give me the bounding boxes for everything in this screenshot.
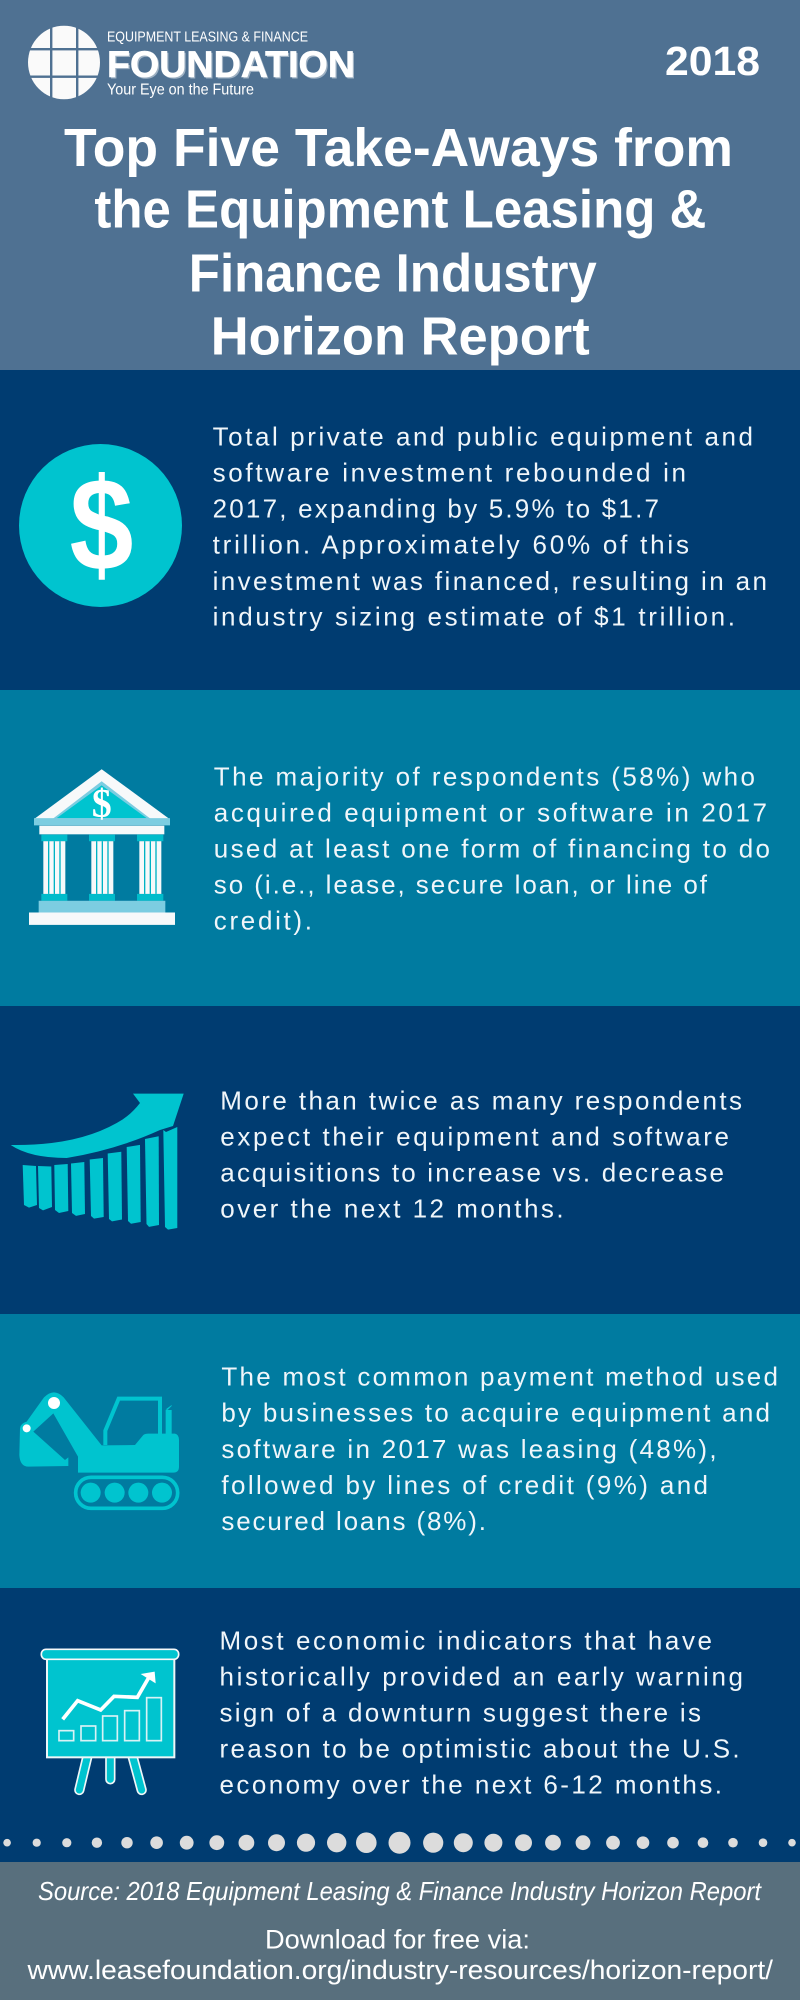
logo: Equipment Leasing & Finance Foundation: Your Eye on the Future [107,81,254,98]
dotted divider [3,1832,796,1854]
text: investment: Total private and public equipment and [213,422,753,452]
icon: presentation board with chart [41,1649,179,1790]
download text: Download for free via: [265,1924,530,1954]
text: majority financed: credit). [214,905,312,935]
panel: footer [0,1862,800,2000]
download url: www.leasefoundation.org/industry-resources/horizon-report/ [26,1955,774,1985]
text: investment: investment was financed, resulting in an [213,566,767,596]
text: leasing: software in 2017 was leasing (48%), [221,1434,717,1464]
text: twice as many: expect their equipment and software [220,1121,729,1151]
panel: acquisitions outlook [0,1006,800,1314]
logo: Equipment Leasing & Finance Foundation: EQUIPMENT LEASING & FINANCE [107,29,308,46]
text: majority financed: used at least one form of financing to do [214,834,770,864]
logo: Equipment Leasing & Finance Foundation: FOUNDATION [107,44,355,85]
icon: dollar coin: $ [70,452,133,599]
title: Top Five Take-Aways from [64,118,733,178]
text: leasing [221,1362,778,1536]
title: Horizon Report [211,306,590,366]
panel: economic indicators [0,1588,800,1862]
icon: dollar coin [19,444,182,607]
icon: bank: $ [92,780,112,826]
panel: financing [0,690,800,1006]
text: indicators: reason to be optimistic about the U.S. [220,1733,740,1763]
text: majority financed: so (i.e., lease, secure loan, or line of [214,869,708,899]
text: indicators: historically provided an early warning [220,1661,743,1691]
icon: excavator [19,1392,179,1508]
text: twice as many [220,1085,742,1223]
title: the Equipment Leasing & [94,180,706,240]
title [64,118,733,366]
logo: Equipment Leasing & Finance Foundation: FOUNDATION [108,46,356,86]
text: indicators: Most economic indicators that have [220,1625,712,1655]
icon: bank [29,769,175,925]
text: investment: trillion. Approximately 60% of this [213,530,689,560]
text: majority financed [214,762,770,935]
text: investment [213,422,767,632]
title: Finance Industry [189,244,597,304]
text: indicators: economy over the next 6-12 months. [220,1769,722,1799]
text: investment: software investment rebounded in [213,458,686,488]
panel: header [0,0,800,370]
text: leasing: secured loans (8%). [221,1506,486,1536]
text: twice as many: acquisitions to increase vs. decrease [220,1157,724,1187]
text: indicators [220,1625,743,1799]
panel: investment rebound [0,370,800,690]
year: 2018 [665,38,760,84]
text: investment: industry sizing estimate of $1 trillion. [213,602,735,632]
logo: Equipment Leasing & Finance Foundation [27,25,356,101]
text: indicators: sign of a downturn suggest there is [220,1697,701,1727]
text: leasing: by businesses to acquire equipment and [221,1398,770,1428]
text: investment: 2017, expanding by 5.9% to $1.7 [213,494,659,524]
text: leasing: followed by lines of credit (9%) and [221,1470,708,1500]
text: twice as many: More than twice as many respondents [220,1085,742,1115]
text: majority financed: acquired equipment or software in 2017 [214,798,767,828]
text: leasing: The most common payment method used [221,1362,778,1392]
icon: rising bar chart with arrow [11,1094,184,1230]
text: majority financed: The majority of respondents (58%) who [214,762,755,792]
panel: payment method [0,1314,800,1588]
text: twice as many: over the next 12 months. [220,1193,564,1223]
icon: logo globe [27,25,101,101]
